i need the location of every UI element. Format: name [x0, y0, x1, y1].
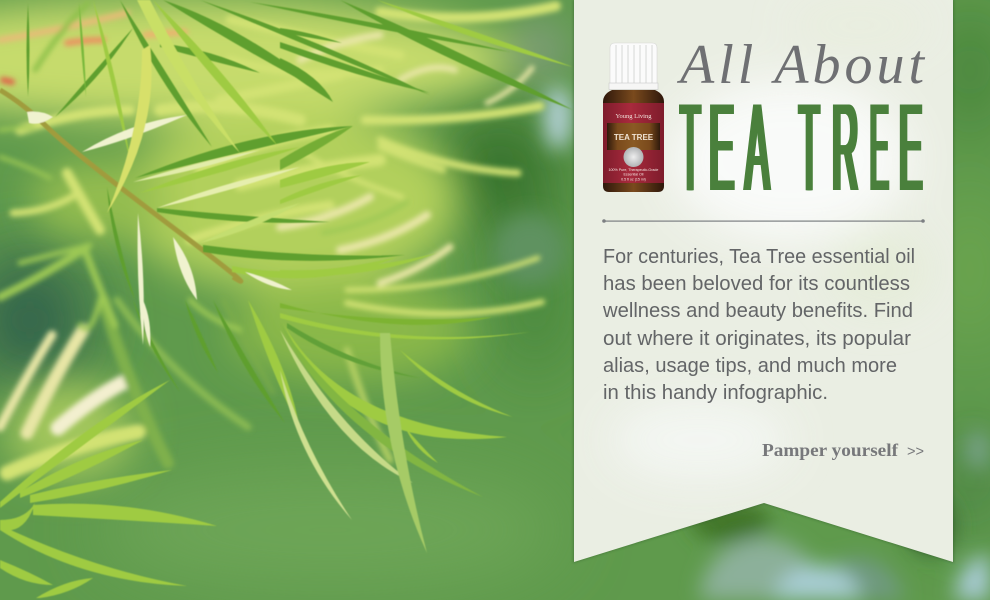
blurred needles behind the branch — [0, 3, 556, 473]
red label — [603, 103, 664, 183]
body text: For centuries, Tea Tree essential oil — [603, 246, 915, 268]
tea tree branch with sharp needles — [0, 0, 573, 598]
heading: All About: All About — [676, 34, 925, 96]
light green needles — [0, 0, 573, 598]
body text: alias, usage tips, and much more — [603, 355, 897, 377]
divider — [602, 219, 925, 223]
icon: essential oil bottle — [603, 43, 664, 192]
call to action: Pamper yourself: Pamper yourself — [762, 440, 898, 460]
icon: essential oil bottle: TEA TREE — [614, 133, 654, 142]
body text: out where it originates, its popular — [603, 328, 911, 350]
label window — [607, 123, 660, 150]
body text — [602, 246, 915, 404]
icon: essential oil bottle: 100% Pure, Therapeutic-Grade — [609, 168, 658, 172]
icon: essential oil bottle: Young Living — [615, 113, 652, 120]
body text: wellness and beauty benefits. Find — [602, 300, 913, 322]
call to action: Pamper yourself: >> — [907, 443, 924, 460]
bottle cap — [610, 43, 657, 84]
main branch — [0, 90, 241, 281]
dark green needles — [26, 0, 573, 423]
pale highlighted needles — [27, 0, 427, 553]
icon: essential oil bottle: Essential Oil — [624, 172, 644, 176]
heading: TEA TREE — [679, 96, 923, 196]
banner ribbon — [573, 0, 954, 563]
body text: in this handy infographic. — [603, 382, 828, 404]
icon: essential oil bottle: 0.5 fl oz (15 ml) — [621, 178, 646, 182]
amber shoulder — [603, 90, 664, 192]
body text: has been beloved for its countless — [603, 273, 910, 295]
